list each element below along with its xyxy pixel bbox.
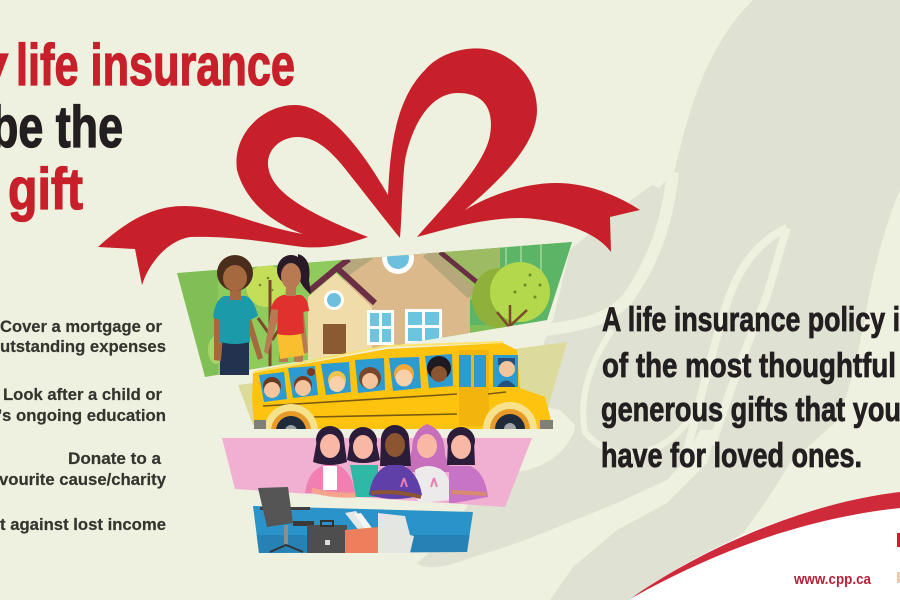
benefits list: Cover a mortgage or xyxy=(0,317,162,336)
lime tree behind family xyxy=(208,265,286,372)
title xyxy=(0,33,295,222)
benefits list: vourite cause/charity xyxy=(0,470,167,489)
title: life insurance xyxy=(16,33,295,98)
footer swoosh xyxy=(630,492,900,600)
paper stack xyxy=(378,513,414,553)
background: grey hand watermark xyxy=(417,0,900,600)
benefits list: utstanding expenses xyxy=(0,337,166,356)
panel: office desk xyxy=(250,487,475,555)
children in windows xyxy=(263,356,516,398)
woman 4 xyxy=(405,424,452,503)
benefits list: t against lost income xyxy=(0,515,166,534)
bus windows xyxy=(259,354,518,402)
pale wedge beside the gift panels xyxy=(480,400,575,472)
woman 2 xyxy=(347,427,380,497)
office chair xyxy=(258,487,314,552)
panel: women with ribbons xyxy=(222,424,532,507)
woman 3 xyxy=(369,425,422,499)
statement text xyxy=(601,301,900,475)
panel: school bus xyxy=(238,341,567,429)
woman xyxy=(264,254,311,362)
man xyxy=(213,255,263,375)
woman 1 xyxy=(305,426,356,495)
ribbon bow xyxy=(98,48,640,285)
benefits list: Donate to a xyxy=(68,449,162,468)
house xyxy=(306,252,478,360)
bus wheels xyxy=(254,402,553,429)
title: gift xyxy=(8,157,83,222)
benefits list: 's ongoing education xyxy=(0,406,166,425)
panel: family and house xyxy=(177,242,572,377)
tree xyxy=(472,262,550,330)
briefcase xyxy=(307,521,347,553)
benefits list: Look after a child or xyxy=(3,385,162,404)
website address: www.cpp.ca xyxy=(793,571,872,588)
woman 5 xyxy=(447,427,488,503)
orange box xyxy=(345,511,378,553)
benefits list xyxy=(0,317,167,534)
